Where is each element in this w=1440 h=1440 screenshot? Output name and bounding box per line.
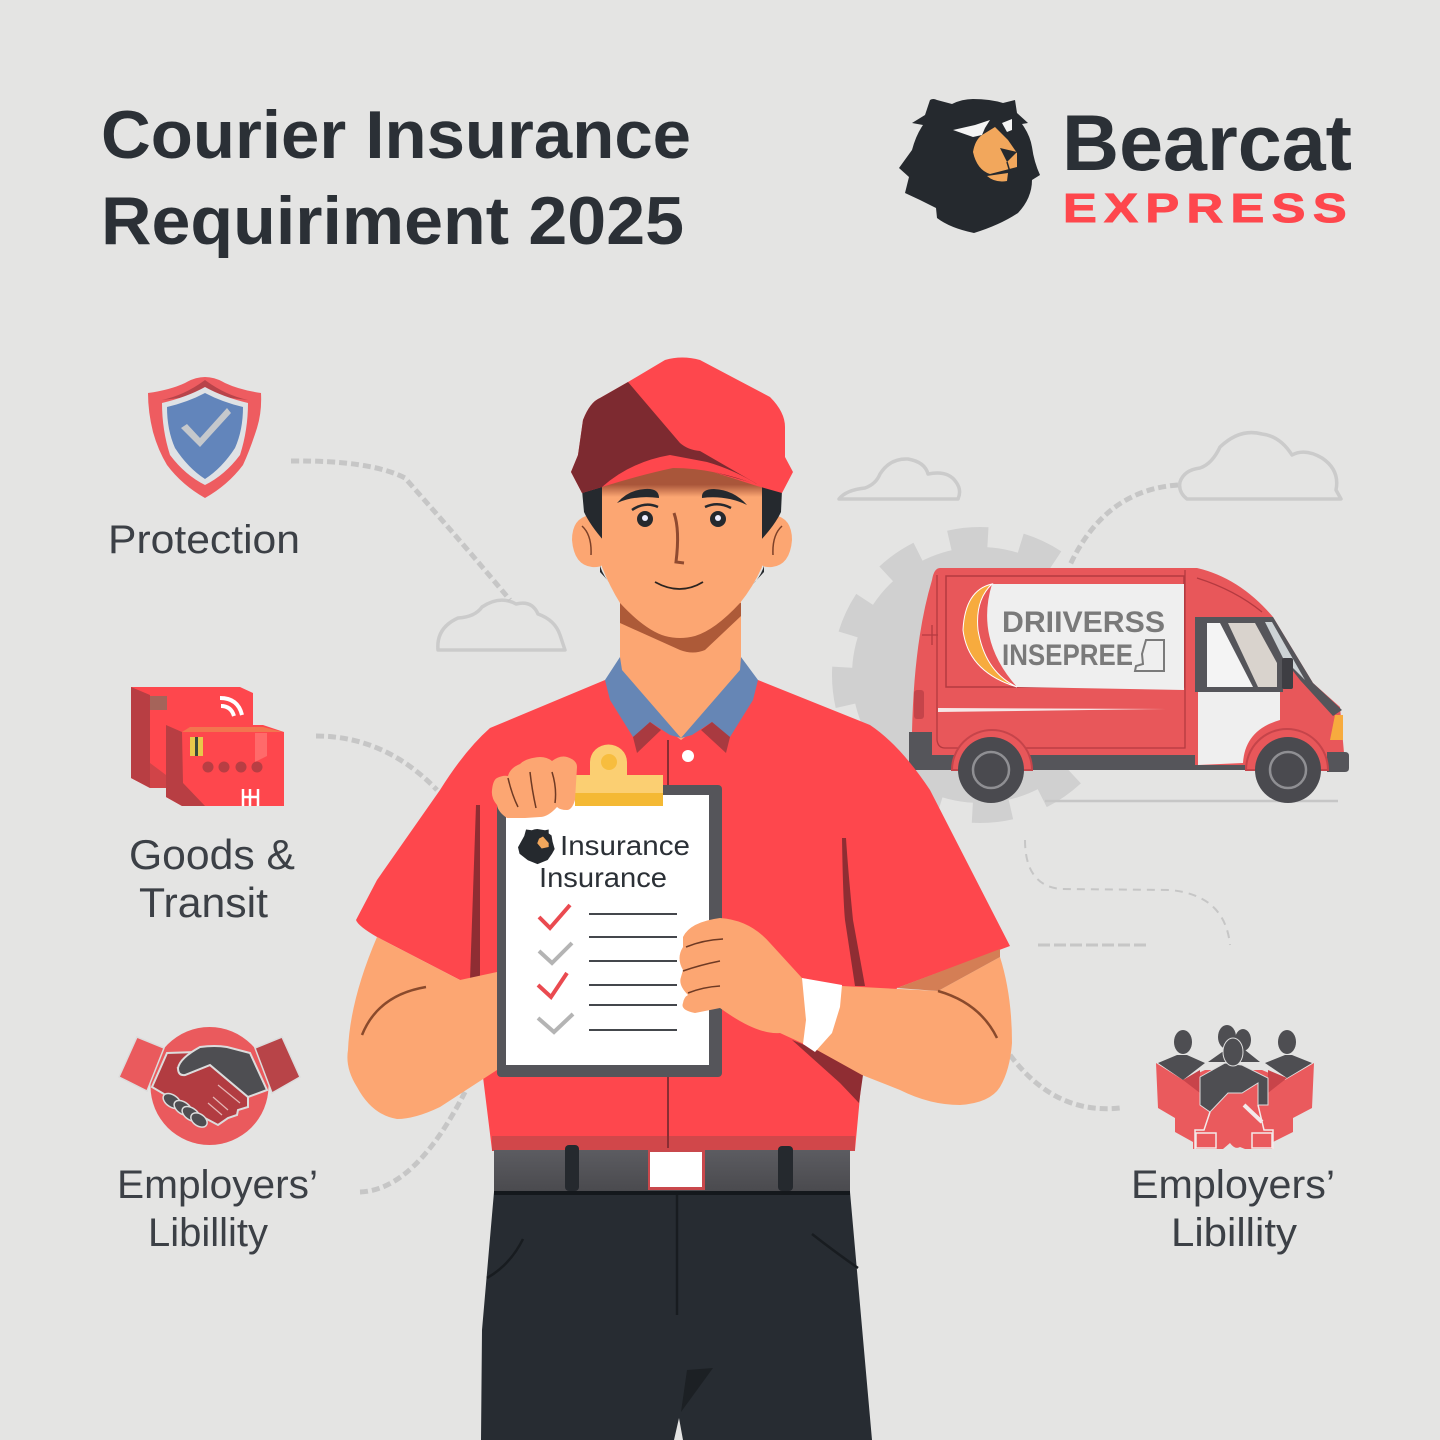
cap shadow on face [602,466,762,497]
side banner [987,584,1184,690]
collar [605,657,758,753]
clipboard [497,745,722,1077]
pants [481,1192,872,1440]
sleeve cast shadow [897,949,1000,991]
mirror [1282,658,1293,689]
left side crease [470,805,480,980]
label: Protection [108,518,300,562]
left arm crease [362,987,426,1035]
right finger lines [683,939,723,993]
label: Libillity [1171,1211,1297,1255]
pants creases [487,1195,858,1315]
rear window [1228,623,1277,687]
cap [571,358,793,493]
label [117,1163,318,1255]
eyebrows [617,489,747,505]
label [129,831,295,926]
label: Goods & [129,831,295,878]
label: Transit [139,879,268,926]
neck [620,595,741,740]
checklist lines [589,914,677,1030]
wheel arches [952,729,1328,770]
ears [572,515,792,567]
headlight [1330,715,1343,740]
logo: Bearcat Express [899,98,1354,233]
checklist marks [538,905,573,1032]
left arm [347,937,497,1119]
shirt [356,680,1010,1150]
dashed connectors [291,461,1338,1192]
face [602,487,762,638]
icon: handshake [119,1027,300,1145]
clouds [438,433,1341,650]
label: Employers’ [1131,1163,1335,1207]
courier figure [347,358,1012,1440]
left hand [492,756,577,818]
rear wheel [958,737,1024,803]
label: Libillity [148,1211,268,1255]
tail light [914,690,924,719]
right arm crease [938,991,997,1038]
title: Requiriment 2025 [101,183,684,259]
side panel outline [946,576,1184,687]
clipboard clip [575,745,663,806]
right side crease [842,838,865,986]
banner text: INSEPREE [1002,639,1133,672]
clipboard heading: Insurance [539,862,667,893]
hair [582,485,782,585]
banner icon [1135,640,1164,671]
clipboard heading: Insurance [560,830,690,861]
body stripe [938,708,1166,712]
neck shadow [620,603,741,652]
logo wordmark: Bearcat [1062,98,1352,187]
clipboard heading [539,830,690,893]
placket line [667,740,669,1148]
chassis [909,732,1245,770]
title: Courier Insurance [101,97,691,173]
icon: bear head [899,99,1040,233]
panel: goods and transit [129,687,295,926]
title [101,97,691,259]
label: Employers’ [117,1163,318,1207]
windshield [1265,622,1305,680]
left finger lines [508,772,556,808]
nose [674,513,684,563]
delivery van [909,568,1349,803]
mini bear logo [518,829,555,864]
side window [1207,623,1253,687]
belt [494,1145,850,1195]
cab window frame [1195,617,1342,716]
pants fold [681,1368,713,1412]
banner text [1002,606,1165,672]
banner crescent [963,584,1017,687]
van body [912,568,1344,770]
shirt hem [492,1136,855,1151]
panel: protection [108,377,300,562]
logo subtitle: EXPRESS [1063,185,1354,231]
body panel lines [922,570,1262,748]
front wheel [1255,737,1321,803]
wristband [802,978,842,1052]
panel: employers liability right [1131,1025,1335,1255]
door [1198,692,1280,765]
shirt button [682,750,694,762]
icon: shield [148,377,261,498]
right arm and hand [680,918,1012,1105]
background gear [818,513,1142,837]
banner text: DRIIVERSS [1002,606,1165,639]
eyes [632,504,731,527]
icon: team [1156,1025,1314,1149]
panel: employers liability left [117,1027,318,1255]
forearm cast shadow [792,1040,863,1103]
smile [655,582,703,589]
icon: parcels [131,687,284,806]
label [1131,1163,1335,1255]
